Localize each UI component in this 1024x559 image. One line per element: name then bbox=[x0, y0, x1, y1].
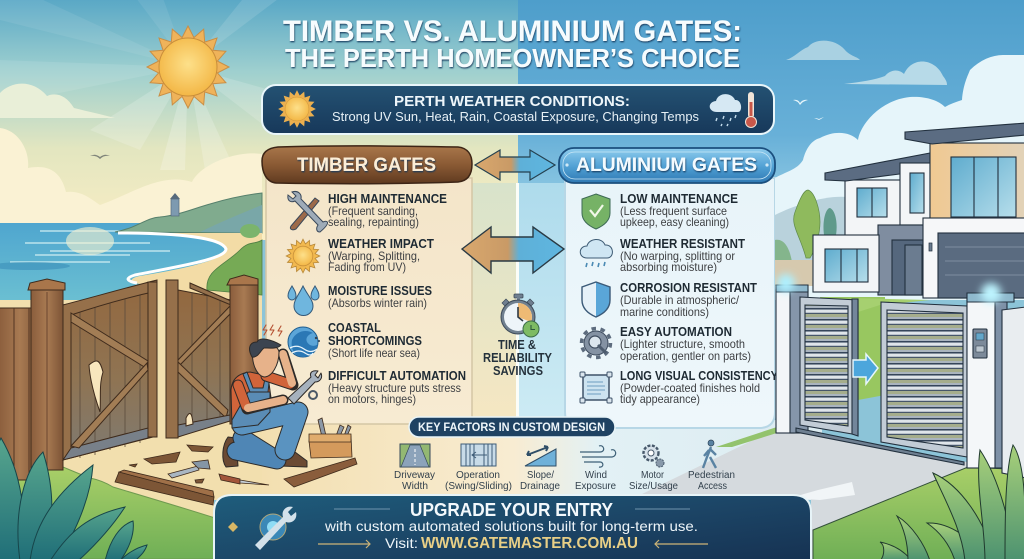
item: long visual consistency bbox=[580, 369, 779, 406]
worker boots bbox=[223, 437, 307, 467]
item: difficult automation: (Heavy structure puts stress bbox=[328, 381, 461, 395]
stress marks bbox=[263, 325, 282, 336]
text: website: Visit: bbox=[385, 535, 418, 551]
panel background bbox=[266, 178, 472, 424]
arrow: pointing left to website bbox=[655, 540, 708, 548]
factor: motor size and usage: Motor bbox=[641, 470, 665, 481]
item: weather impact: WEATHER IMPACT bbox=[328, 237, 434, 251]
banner: perth weather conditions bbox=[262, 85, 774, 134]
section: key factors in custom design bbox=[394, 417, 735, 492]
factor: driveway width: Width bbox=[402, 481, 428, 492]
arrow: top comparison bbox=[475, 150, 555, 180]
item: weather resistant: WEATHER RESISTANT bbox=[620, 237, 745, 251]
item: moisture issues: (Absorbs winter rain) bbox=[328, 296, 427, 310]
glows on gate posts bbox=[777, 274, 1001, 303]
worker overalls bib bbox=[232, 372, 270, 428]
item: coastal shortcomings: SHORTCOMINGS bbox=[328, 334, 422, 348]
arrow: pointing right to website bbox=[318, 540, 370, 548]
item: corrosion resistant: CORROSION RESISTANT bbox=[620, 281, 757, 295]
heading pill bbox=[409, 417, 615, 437]
small gear bbox=[309, 391, 317, 399]
text: website: WWW.GATEMASTER.COM.AU bbox=[421, 535, 638, 552]
factor: wind exposure: Wind bbox=[585, 470, 607, 481]
item: easy automation: operation, gentler on parts) bbox=[620, 349, 751, 363]
item: easy automation: (Lighter structure, smooth bbox=[620, 337, 745, 351]
text: time and reliability savings: TIME & bbox=[498, 338, 536, 352]
scene: sea and headland bbox=[0, 193, 262, 313]
heading: timber gates sign: TIMBER GATES bbox=[297, 155, 436, 176]
factor: wind exposure bbox=[575, 446, 616, 492]
text: time and reliability savings: SAVINGS bbox=[493, 364, 543, 378]
item: difficult automation: DIFFICULT AUTOMATION bbox=[328, 369, 466, 383]
banner: upgrade your entry bbox=[214, 495, 811, 559]
centre strip bbox=[472, 183, 565, 423]
background: coastal sky bbox=[0, 0, 1024, 300]
debris: broken planks and tools bbox=[115, 418, 357, 505]
item: easy automation bbox=[582, 325, 751, 363]
heading pill: KEY FACTORS IN CUSTOM DESIGN bbox=[418, 420, 605, 434]
item: high maintenance: sealing, repainting) bbox=[328, 215, 419, 229]
panel: timber gates bbox=[262, 146, 565, 424]
item: long visual consistency: tidy appearance) bbox=[620, 392, 700, 406]
item: corrosion resistant: (Durable in atmospheric/ bbox=[620, 293, 740, 307]
scene: aluminium sliding gates bbox=[776, 285, 1024, 478]
arrow: large comparison bbox=[462, 227, 564, 273]
plant: foreground left bbox=[0, 438, 147, 559]
factor: wind exposure: Exposure bbox=[575, 481, 616, 492]
icon: large sun bbox=[147, 26, 229, 108]
icon: rain cloud bbox=[710, 94, 741, 126]
clouds and bird, left bbox=[0, 84, 262, 226]
item: weather resistant bbox=[580, 237, 745, 274]
factor: motor size and usage: Size/Usage bbox=[629, 481, 678, 492]
item: low maintenance: upkeep, easy cleaning) bbox=[620, 215, 729, 229]
factor: driveway width bbox=[394, 444, 435, 492]
item: corrosion resistant bbox=[582, 281, 757, 319]
wrench in hand bbox=[288, 371, 322, 404]
worker hair bbox=[250, 339, 281, 357]
plant: foreground right bbox=[880, 445, 1024, 559]
text: weather list: Strong UV Sun, Heat, Rain, Coastal Exposure, Changing Temps bbox=[332, 110, 699, 124]
item: moisture issues: MOISTURE ISSUES bbox=[328, 284, 432, 298]
text: time and reliability savings bbox=[483, 338, 553, 378]
worker head bbox=[253, 344, 279, 377]
factor: slope and drainage: Drainage bbox=[520, 481, 560, 492]
panel: aluminium gates bbox=[559, 148, 779, 428]
illustration: worried worker bbox=[223, 325, 322, 467]
icon: wrench emblem bbox=[228, 507, 296, 550]
factor: pedestrian access: Pedestrian bbox=[688, 470, 735, 481]
factor: operation bbox=[445, 444, 512, 492]
heading: aluminium gates pill: ALUMINIUM GATES bbox=[576, 155, 757, 176]
title bbox=[283, 15, 742, 73]
text: upgrade heading: UPGRADE YOUR ENTRY bbox=[410, 500, 613, 520]
panel background bbox=[565, 178, 775, 428]
text: time and reliability savings: RELIABILITY bbox=[483, 351, 553, 365]
worker raised leg bbox=[242, 412, 298, 450]
item: low maintenance: LOW MAINTENANCE bbox=[620, 192, 738, 206]
scene: damaged timber gates bbox=[0, 275, 258, 480]
item: difficult automation: on motors, hinges) bbox=[328, 392, 416, 406]
item: weather impact: Fading from UV) bbox=[328, 260, 406, 274]
scene: ground, sand and grass bbox=[0, 300, 822, 559]
item: weather resistant: (No warping, splitting or bbox=[620, 249, 735, 263]
worker arms bbox=[238, 354, 293, 409]
factor: operation: Operation bbox=[456, 470, 500, 481]
arrow: sliding gate direction bbox=[853, 354, 878, 384]
item: long visual consistency: LONG VISUAL CONSISTENCY bbox=[620, 369, 779, 383]
clouds and birds, right bbox=[786, 41, 947, 120]
factor: operation: (Swing/Sliding) bbox=[445, 481, 512, 492]
icon: thermometer bbox=[746, 92, 756, 128]
item: easy automation: EASY AUTOMATION bbox=[620, 325, 732, 339]
item: low maintenance: (Less frequent surface bbox=[620, 204, 727, 218]
text: upgrade description: with custom automated solutions built for long-term use. bbox=[324, 518, 698, 534]
factor: slope and drainage: Slope/ bbox=[527, 470, 554, 481]
title: THE PERTH HOMEOWNER’S CHOICE bbox=[285, 45, 740, 73]
item: weather impact bbox=[286, 237, 434, 274]
item: coastal shortcomings: COASTAL bbox=[328, 321, 381, 335]
factor: motor size and usage bbox=[629, 446, 678, 492]
icon: stopwatch bbox=[501, 294, 539, 337]
item: corrosion resistant: marine conditions) bbox=[620, 305, 709, 319]
worker torso bbox=[231, 372, 272, 428]
worker kneeling leg bbox=[236, 438, 277, 460]
item: long visual consistency: (Powder-coated finishes hold bbox=[620, 381, 760, 395]
item: low maintenance bbox=[582, 192, 738, 229]
scene: driveway and lawn bbox=[640, 297, 1024, 559]
heading: aluminium gates pill bbox=[559, 148, 775, 183]
factor: driveway width: Driveway bbox=[394, 470, 435, 481]
item: weather resistant: absorbing moisture) bbox=[620, 260, 717, 274]
item: moisture issues bbox=[288, 284, 432, 316]
icon: sun bbox=[278, 90, 316, 128]
text: weather heading: PERTH WEATHER CONDITIONS: bbox=[394, 93, 630, 110]
item: high maintenance bbox=[288, 191, 447, 232]
item: high maintenance: (Frequent sanding, bbox=[328, 204, 418, 218]
scene: modern house bbox=[775, 55, 1024, 300]
item: coastal shortcomings: (Short life near sea) bbox=[328, 346, 420, 360]
item: high maintenance: HIGH MAINTENANCE bbox=[328, 192, 447, 206]
heading: timber gates sign bbox=[262, 146, 472, 184]
item: weather impact: (Warping, Splitting, bbox=[328, 249, 420, 263]
factor: pedestrian access: Access bbox=[698, 481, 727, 492]
factor: slope and drainage bbox=[520, 446, 560, 492]
title: TIMBER VS. ALUMINIUM GATES: bbox=[283, 15, 742, 48]
factor: pedestrian access bbox=[688, 440, 735, 492]
item: coastal shortcomings bbox=[288, 321, 422, 360]
item: difficult automation bbox=[328, 369, 466, 406]
